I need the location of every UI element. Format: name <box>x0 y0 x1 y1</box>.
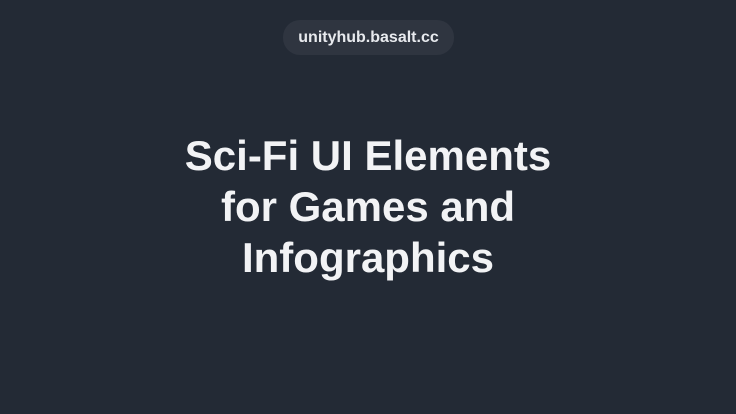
domain pill: unityhub.basalt.cc <box>298 29 439 46</box>
title: Sci-Fi UI Elements <box>185 132 551 179</box>
title: Infographics <box>242 234 494 281</box>
title <box>185 132 551 281</box>
title: for Games and <box>221 183 515 230</box>
domain pill <box>283 20 454 55</box>
